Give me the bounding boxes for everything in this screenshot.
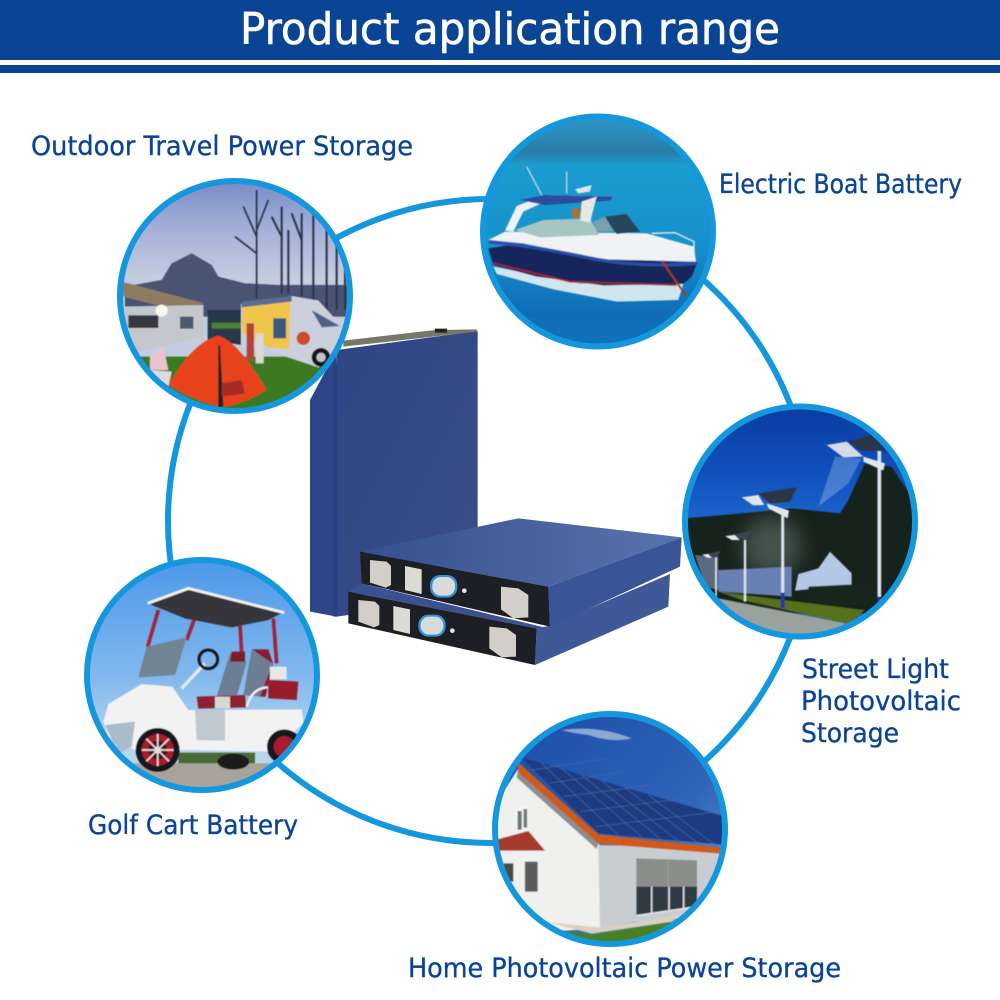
upper flat battery <box>360 518 682 627</box>
connecting ring <box>168 199 812 843</box>
label: street light: Storage <box>801 718 899 749</box>
label: golf cart: Golf Cart Battery <box>88 810 298 841</box>
upright battery <box>310 329 478 617</box>
title: Product application range <box>240 4 780 55</box>
battery product group <box>310 329 682 665</box>
label: electric boat: Electric Boat Battery <box>719 169 962 200</box>
label: outdoor travel: Outdoor Travel Power Storage <box>31 131 413 162</box>
photo: home solar <box>488 708 732 952</box>
label: street light: Street Light <box>802 654 949 685</box>
header banner <box>0 0 1000 73</box>
label: street light: Photovoltaic <box>801 686 961 717</box>
photo: outdoor camping <box>115 177 355 417</box>
lower flat battery <box>348 574 670 665</box>
label: street light <box>801 654 961 749</box>
photo: street light <box>678 400 922 643</box>
label: home photovoltaic: Home Photovoltaic Power Storage <box>408 953 841 984</box>
photo: electric boat <box>477 113 720 350</box>
photo: golf cart <box>82 555 323 797</box>
